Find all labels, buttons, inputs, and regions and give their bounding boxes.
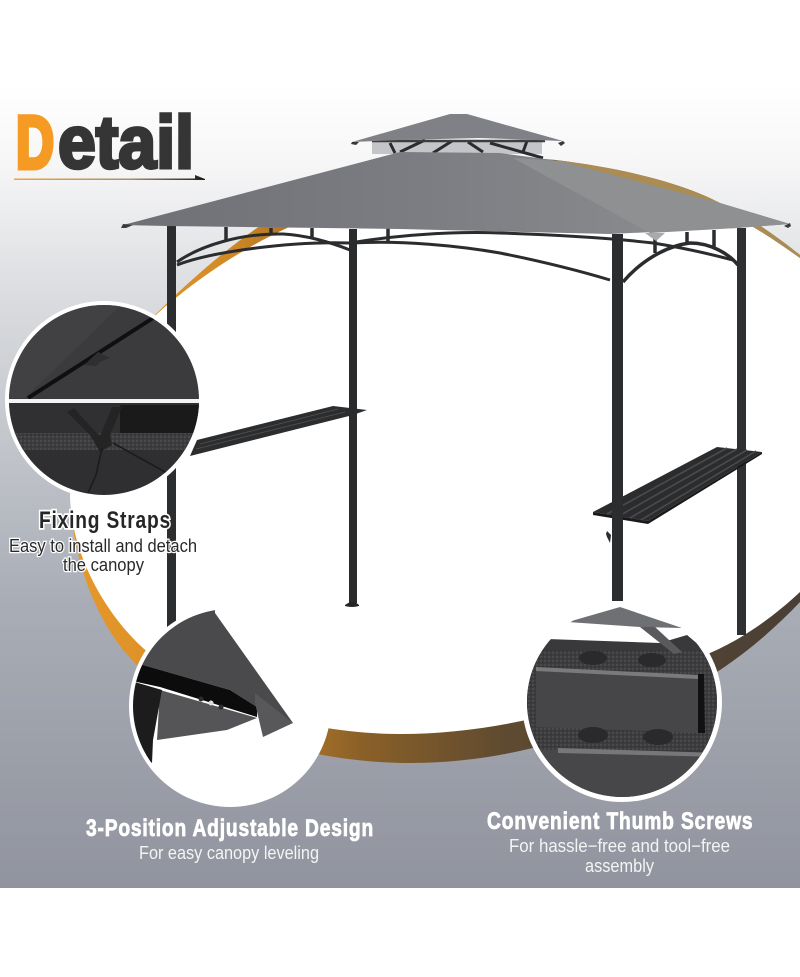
- gazebo: [121, 114, 791, 635]
- panel: thumb screws photo: [522, 602, 725, 810]
- black frame bar: [136, 664, 257, 717]
- fixing straps description: the canopy: [63, 555, 144, 575]
- dark frame body: [527, 635, 717, 797]
- back left post: [167, 226, 176, 627]
- panel: adjustable design photo: [128, 600, 331, 807]
- top canopy: [351, 114, 565, 146]
- adjustable design label: 3-Position Adjustable Design: [86, 814, 373, 842]
- roof arches: [177, 227, 738, 282]
- fixing straps label: [9, 506, 197, 575]
- title: Detail: etail: [58, 101, 194, 184]
- thumb screws description: assembly: [585, 856, 654, 876]
- adjustable design label: [86, 814, 373, 863]
- front left post: [345, 229, 359, 607]
- left shelf: [190, 406, 367, 456]
- thumb screws description: For hassle−free and tool−free: [509, 836, 730, 856]
- lower photo: [5, 403, 203, 501]
- adjustable design description: For easy canopy leveling: [139, 843, 319, 863]
- right shelf: [593, 447, 762, 524]
- upper photo: [5, 301, 203, 399]
- white oval interior: [70, 169, 800, 734]
- back right post: [737, 228, 746, 635]
- orange swoosh ring: [70, 158, 800, 763]
- corner flap: [255, 693, 293, 737]
- title underline arrow: [14, 175, 205, 180]
- lower plate: [540, 750, 702, 797]
- main canopy: [121, 152, 791, 241]
- front right post: [612, 234, 623, 601]
- frame post: [133, 682, 162, 763]
- panel: fixing straps photo: [5, 301, 199, 495]
- thumb screws label: Convenient Thumb Screws: [487, 807, 753, 835]
- thumb screws label: [487, 807, 753, 876]
- lantern struts: [372, 140, 545, 158]
- lower fabric: [157, 690, 257, 740]
- thumb screws description: [509, 836, 730, 876]
- fixing straps description: [9, 536, 197, 575]
- canopy corner fabric: [142, 610, 293, 723]
- fixing straps description: Easy to install and detach: [9, 536, 197, 556]
- small roof sliver: [568, 607, 682, 628]
- slotted panel: [536, 667, 705, 733]
- adjustment holes: [198, 696, 224, 710]
- gold arc upper right: [556, 160, 800, 258]
- shelf latch: [606, 531, 611, 543]
- fixing straps label: Fixing Straps: [39, 506, 170, 534]
- photo divider: [0, 399, 210, 403]
- thumb screw knobs: [578, 651, 673, 745]
- textured beam: [522, 650, 722, 750]
- title: Detail: D: [16, 101, 54, 184]
